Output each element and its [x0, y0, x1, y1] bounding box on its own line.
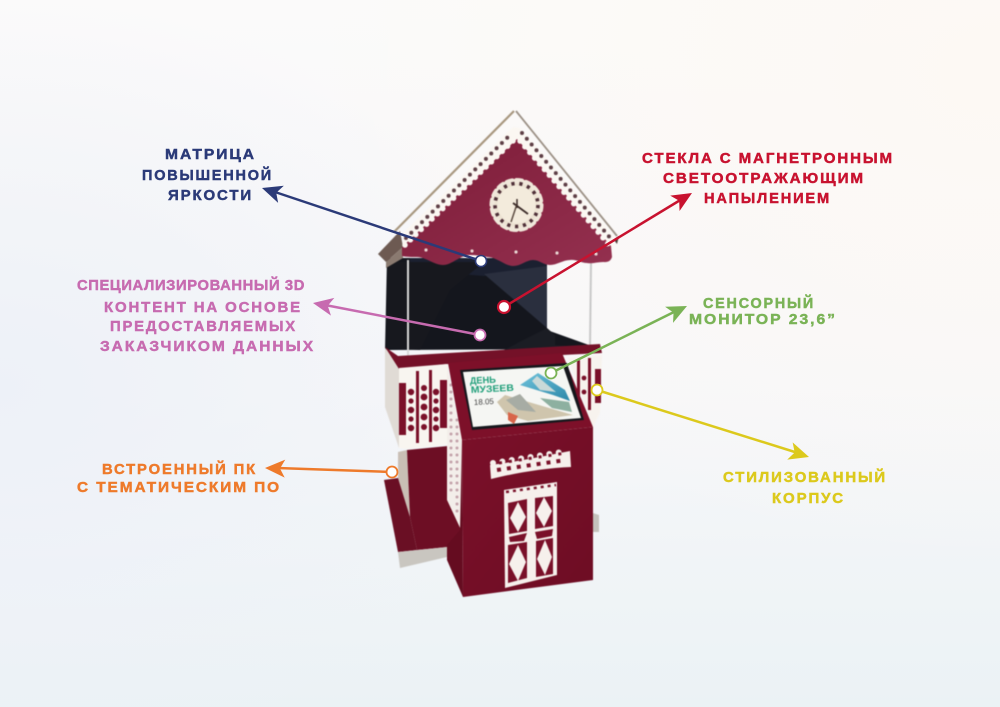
monitor graphic: [520, 373, 570, 401]
callout: matrix brightness: [142, 147, 486, 266]
callout: matrix brightness: МАТРИЦА: [165, 147, 256, 163]
callout: glass coating: СТЕКЛА С МАГНЕТРОННЫМ: [642, 151, 894, 167]
kiosk illustration: [378, 111, 619, 597]
callout: touch monitor: МОНИТОР 23,6”: [689, 312, 837, 328]
callout: built-in PC: ВСТРОЕННЫЙ ПК: [102, 460, 257, 478]
lace cut-outs: [405, 133, 612, 246]
callout: 3D content: ЗАКАЗЧИКОМ ДАННЫХ: [100, 339, 315, 355]
icon: clock: [492, 180, 541, 230]
monitor headline: ДЕНЬ: [470, 375, 496, 387]
rear tray: [384, 478, 417, 552]
callout: glass coating: НАПЫЛЕНИЕМ: [704, 191, 831, 207]
lower left flank: [447, 440, 463, 597]
callout: matrix brightness: ЯРКОСТИ: [168, 188, 253, 204]
touch monitor: [460, 363, 584, 430]
monitor slope: [448, 353, 593, 440]
decorative door: [504, 482, 557, 588]
roof lace band: [403, 127, 614, 250]
roof rivets: [424, 248, 598, 256]
callout: built-in PC: С ТЕМАТИЧЕСКИМ ПО: [77, 480, 281, 496]
decorative lintel: [490, 451, 571, 479]
callout: matrix brightness: ПОВЫШЕННОЙ: [142, 166, 273, 184]
silver foot: [593, 513, 599, 532]
glass support rods: [407, 260, 409, 358]
roof: [378, 111, 619, 268]
callout: touch monitor: [546, 294, 837, 378]
monitor headline second line: МУЗЕЕВ: [471, 383, 514, 396]
kiosk base: [384, 344, 602, 597]
callout: built-in PC: [77, 459, 398, 496]
gable panel: [402, 139, 612, 266]
callout: glass coating: [498, 151, 894, 313]
callout: touch monitor: СЕНСОРНЫЙ: [703, 294, 815, 312]
callout: 3D content: СПЕЦИАЛИЗИРОВАННЫЙ 3D: [77, 276, 305, 294]
callout: glass coating: СВЕТООТРАЖАЮЩИМ: [663, 171, 865, 187]
upper left side panel: [385, 348, 399, 448]
monitor date: 18.05: [474, 397, 495, 407]
lower rear block: [398, 450, 410, 517]
callout: 3D content: ПРЕДОСТАВЛЯЕМЫХ: [110, 319, 297, 335]
callout: styled body: [592, 384, 887, 507]
baluster panel: [399, 364, 461, 449]
callout: styled body: СТИЛИЗОВАННЫЙ: [723, 468, 887, 486]
callout: 3D content: [77, 276, 486, 355]
shelf plate: [385, 344, 602, 369]
callout: styled body: КОРПУС: [772, 491, 845, 507]
holographic chamber: [385, 258, 600, 358]
callout: 3D content: КОНТЕНТ НА ОСНОВЕ: [104, 300, 302, 316]
right baluster panel: [568, 355, 602, 427]
side lace panel: [447, 364, 462, 532]
front body: [462, 427, 593, 597]
